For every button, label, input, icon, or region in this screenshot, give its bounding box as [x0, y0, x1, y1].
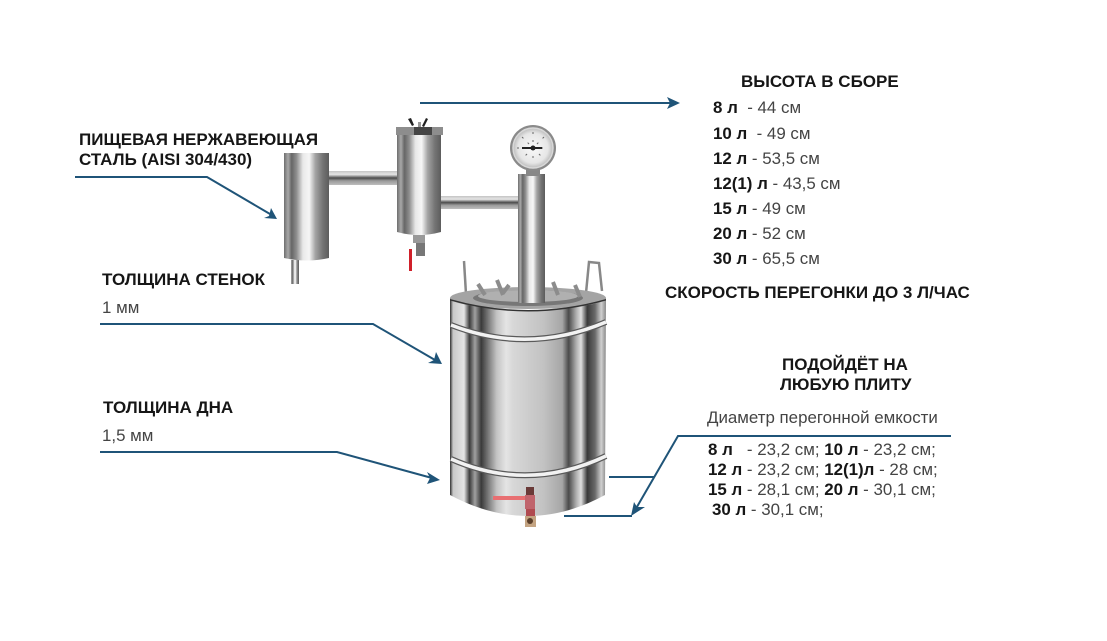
arrow: steel — [75, 177, 277, 219]
list: heights by volume: 30 л - 65,5 см — [713, 249, 820, 268]
cooler cylinder — [284, 153, 329, 284]
illustration: distiller apparatus — [284, 118, 606, 527]
pipe: lower connector — [441, 196, 521, 209]
list: heights by volume: 12(1) л - 43,5 см — [713, 174, 840, 193]
heading: food-grade steel: ПИЩЕВАЯ НЕРЖАВЕЮЩАЯ — [79, 130, 318, 149]
list: diameters by volume: 30 л - 30,1 см; — [712, 500, 824, 519]
label: tank diameter: Диаметр перегонной емкости — [707, 408, 938, 427]
list: heights by volume: 10 л - 49 см — [713, 124, 810, 143]
heading: food-grade steel — [79, 130, 318, 169]
block: bottom thickness: ТОЛЩИНА ДНА — [103, 398, 233, 417]
heading: assembled height: ВЫСОТА В СБОРЕ — [741, 72, 899, 91]
reflux column — [396, 118, 443, 271]
pipe: upper connector — [329, 171, 397, 185]
drain tap — [493, 487, 536, 527]
list: diameters by volume: 8 л - 23,2 см; 10 л - 23,2 см; — [708, 440, 936, 459]
block: wall thickness — [102, 270, 266, 317]
arrow: diameter — [564, 436, 951, 516]
arrow: height — [420, 97, 680, 109]
list: diameters by volume — [708, 440, 938, 519]
tank body — [450, 261, 606, 516]
list: diameters by volume: 15 л - 28,1 см; 20 л - 30,1 см; — [708, 480, 936, 499]
list: heights by volume: 20 л - 52 см — [713, 224, 806, 243]
list: heights by volume — [713, 98, 840, 268]
list: heights by volume: 12 л - 53,5 см — [713, 149, 820, 168]
heading: suitable for any stove: ЛЮБУЮ ПЛИТУ — [780, 375, 912, 394]
heading: suitable for any stove — [780, 355, 912, 394]
heading: food-grade steel: СТАЛЬ (AISI 304/430) — [79, 150, 252, 169]
block: wall thickness: ТОЛЩИНА СТЕНОК — [102, 270, 266, 289]
arrow: bottom — [100, 452, 440, 484]
list: heights by volume: 15 л - 49 см — [713, 199, 806, 218]
thermometer gauge — [510, 125, 556, 176]
list: diameters by volume: 12 л - 23,2 см; 12(1)л - 28 см; — [708, 460, 938, 479]
block: bottom thickness: 1,5 мм — [102, 426, 153, 445]
steam column — [518, 174, 545, 296]
heading: suitable for any stove: ПОДОЙДЁТ НА — [782, 355, 908, 374]
heading: distillation speed: СКОРОСТЬ ПЕРЕГОНКИ ДО 3 Л/ЧАС — [665, 283, 970, 302]
list: heights by volume: 8 л - 44 см — [713, 98, 801, 117]
arrow: wall — [100, 324, 442, 364]
block: wall thickness: 1 мм — [102, 298, 139, 317]
block: bottom thickness — [102, 398, 233, 445]
